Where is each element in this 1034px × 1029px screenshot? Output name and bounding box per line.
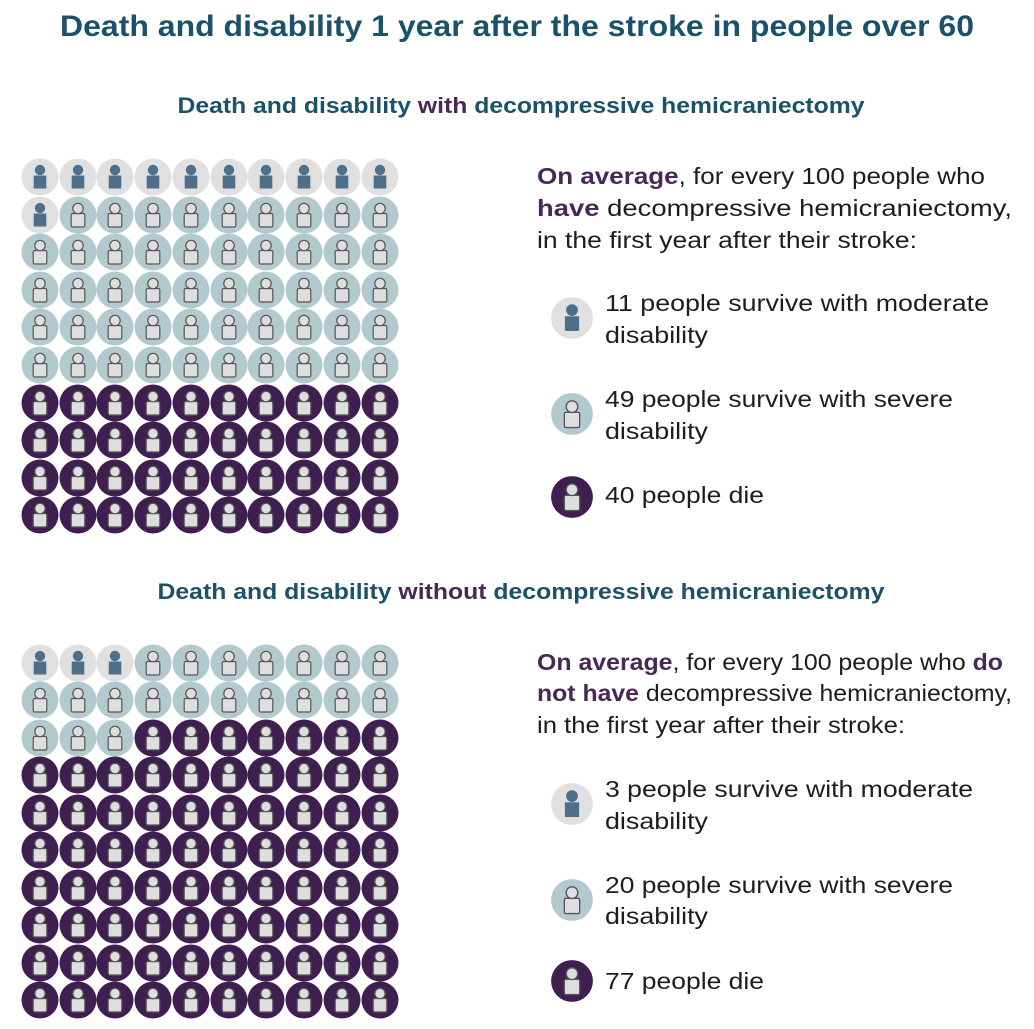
text block: with surgery intro: in the first year after their stroke: [537,227,917,253]
waffle chart: with surgery [22,158,398,534]
subtitle: with surgery: Death and disability with decompressive hemicraniectomy [178,93,865,118]
legend: without surgery [551,776,973,1002]
legend: with surgery [551,290,989,518]
legend: with surgery: disability [605,322,709,348]
text block: without surgery intro: not have decompressive hemicraniectomy, [537,680,1012,706]
text block: without surgery intro [537,649,1012,738]
legend: with surgery: 40 people die [605,482,764,508]
waffle chart: without surgery [22,644,398,1018]
legend: with surgery: 49 people survive with severe [605,386,953,412]
legend: without surgery: disability [605,808,709,834]
text block: without surgery intro: On average , for every 100 people who do [537,649,1003,675]
text block: with surgery intro [537,163,1012,253]
legend: without surgery: 77 people die [605,968,764,994]
subtitle: without surgery: Death and disability without decompressive hemicraniectomy [158,579,885,604]
legend: without surgery: 20 people survive with severe [605,872,953,898]
legend: with surgery: disability [605,418,709,444]
legend: without surgery: disability [605,903,709,929]
title: Death and disability 1 year after the stroke in people over 60 [60,10,974,43]
legend: without surgery: 3 people survive with moderate [605,776,973,802]
text block: with surgery intro: On average , for every 100 people who [537,163,985,189]
text block: without surgery intro: in the first year after their stroke: [537,712,905,738]
text block: with surgery intro: have decompressive hemicraniectomy, [537,195,1012,221]
legend: with surgery: 11 people survive with moderate [605,290,989,316]
